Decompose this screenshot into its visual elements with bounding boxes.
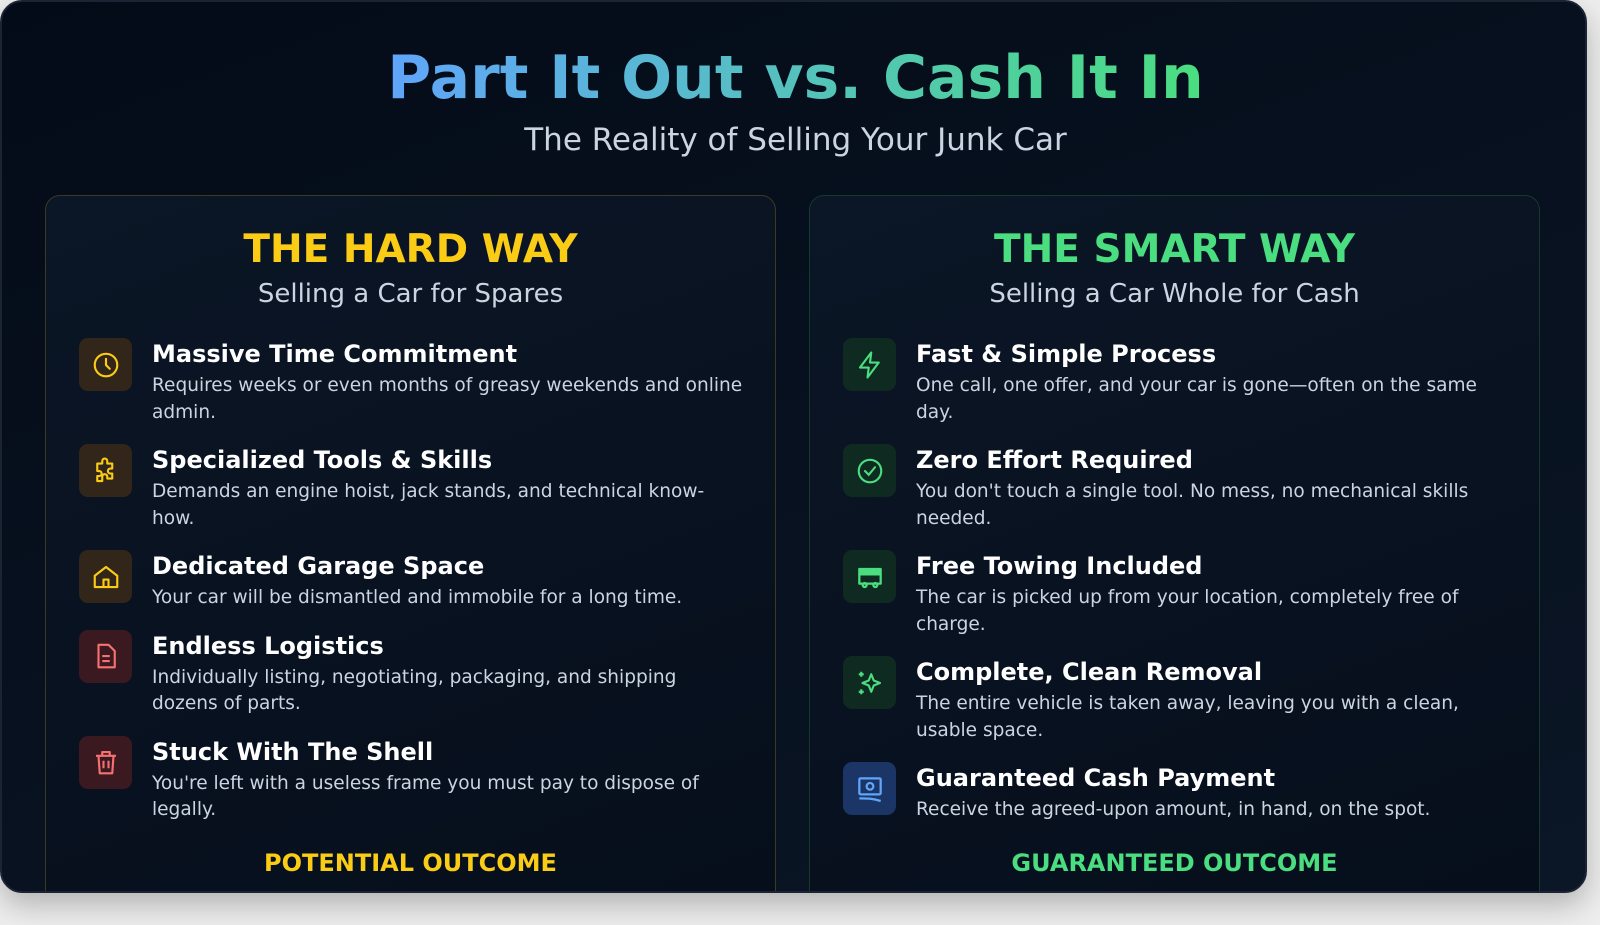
outcome: guaranteed: GUARANTEED OUTCOME <box>1011 849 1338 877</box>
panel: hard way <box>45 195 776 915</box>
item: garage <box>79 550 682 608</box>
item: removal: Complete, Clean Removal <box>916 658 1262 686</box>
heading: hard way: THE HARD WAY <box>243 227 578 272</box>
item: tools: Demands an engine hoist, jack stands, and technical know-how. <box>152 481 704 528</box>
item: cash: Guaranteed Cash Payment <box>916 764 1275 792</box>
item: logistics: Individually listing, negotiating, packaging, and shipping dozens of parts. <box>152 666 676 714</box>
item: garage: Your car will be dismantled and immobile for a long time. <box>152 587 682 608</box>
subheading: Selling a Car Whole for Cash <box>989 279 1360 309</box>
item: shell <box>79 736 700 820</box>
item: fast: One call, one offer, and your car is gone—often on the same day. <box>916 375 1477 422</box>
item: time <box>79 338 742 422</box>
item: zero effort: Zero Effort Required <box>916 446 1193 474</box>
item: towing <box>843 550 1459 634</box>
outcome: potential: POTENTIAL OUTCOME <box>264 849 557 877</box>
item: garage: Dedicated Garage Space <box>152 552 484 580</box>
subheading: Selling a Car for Spares <box>258 279 563 309</box>
item: logistics <box>79 630 676 714</box>
item: logistics: Endless Logistics <box>152 632 384 660</box>
item: fast: Fast & Simple Process <box>916 340 1216 368</box>
item: towing: Free Towing Included <box>916 552 1202 580</box>
list: smart way items <box>843 338 1477 820</box>
item: towing: The car is picked up from your location, completely free of charge. <box>916 587 1458 634</box>
panel: smart way <box>809 195 1540 915</box>
item: shell: Stuck With The Shell <box>152 738 433 766</box>
item: cash: Receive the agreed-upon amount, in hand, on the spot. <box>916 799 1430 820</box>
item: cash <box>843 762 1430 820</box>
item: zero effort: You don't touch a single tool. No mess, no mechanical skills needed. <box>916 481 1468 528</box>
heading: smart way: THE SMART WAY <box>994 227 1355 272</box>
item: time: Requires weeks or even months of greasy weekends and online admin. <box>152 375 742 422</box>
item: fast <box>843 338 1477 422</box>
item: zero effort <box>843 444 1468 528</box>
subtitle: The Reality of Selling Your Junk Car <box>524 122 1067 158</box>
title: Part It Out vs. Cash It In <box>387 43 1204 113</box>
item: removal: The entire vehicle is taken away, leaving you with a clean, usable space. <box>916 693 1459 740</box>
item: removal <box>843 656 1459 740</box>
item: time: Massive Time Commitment <box>152 340 517 368</box>
item: tools <box>79 444 704 528</box>
item: shell: You're left with a useless frame you must pay to dispose of legally. <box>152 772 699 820</box>
list: hard way items <box>79 338 742 820</box>
item: tools: Specialized Tools & Skills <box>152 446 492 474</box>
